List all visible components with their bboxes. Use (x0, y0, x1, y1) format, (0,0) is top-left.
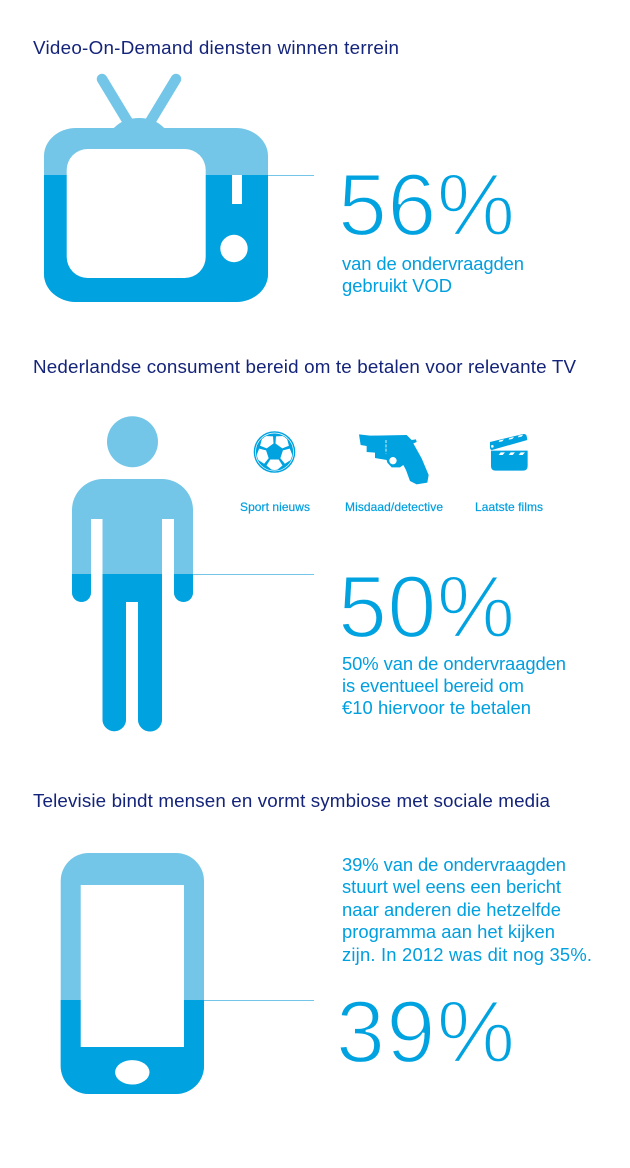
text: bericht tijdens kijken: programma aan het kijken (342, 921, 555, 942)
icon: television (44, 79, 268, 302)
label: misdaad/detective: Misdaad/detective (345, 500, 443, 514)
icon: revolver (359, 434, 429, 484)
text: gebruikt VOD: gebruikt VOD (342, 275, 452, 296)
icon: person (72, 416, 193, 732)
statistic: 56%: 56% (338, 155, 515, 254)
text: bericht tijdens kijken: naar anderen die hetzelfde (342, 899, 561, 920)
icon: football (253, 431, 296, 473)
text: bericht tijdens kijken: 39% van de ondervraagden (342, 854, 566, 875)
text: bericht tijdens kijken (342, 854, 592, 965)
text: bereid om te betalen: is eventueel bereid om (342, 675, 524, 696)
text: bericht tijdens kijken: zijn. In 2012 was dit nog 35%. (342, 944, 592, 965)
text: bereid om te betalen: €10 hiervoor te betalen (342, 697, 531, 718)
text: gebruikt VOD (342, 253, 524, 296)
text: bereid om te betalen (342, 653, 566, 718)
icon: smartphone (61, 853, 204, 1094)
statistic: 50%: 50% (338, 557, 515, 656)
label: laatste films: Laatste films (475, 500, 543, 514)
heading: consument bereid te betalen: Nederlandse consument bereid om te betalen voor relevante TV (33, 356, 576, 377)
icon: film clapperboard (490, 434, 528, 471)
heading: televisie bindt mensen: Televisie bindt mensen en vormt symbiose met sociale media (33, 790, 551, 811)
connector line: person (193, 574, 314, 575)
heading: video on demand: Video-On-Demand diensten winnen terrein (33, 37, 399, 58)
connector line: smartphone (204, 1000, 314, 1001)
text: bereid om te betalen: 50% van de ondervraagden (342, 653, 566, 674)
label: sport nieuws: Sport nieuws (240, 500, 310, 514)
connector line: television (268, 175, 314, 176)
text: bericht tijdens kijken: stuurt wel eens een bericht (342, 876, 561, 897)
statistic: 39%: 39% (336, 982, 515, 1081)
text: gebruikt VOD: van de ondervraagden (342, 253, 524, 274)
